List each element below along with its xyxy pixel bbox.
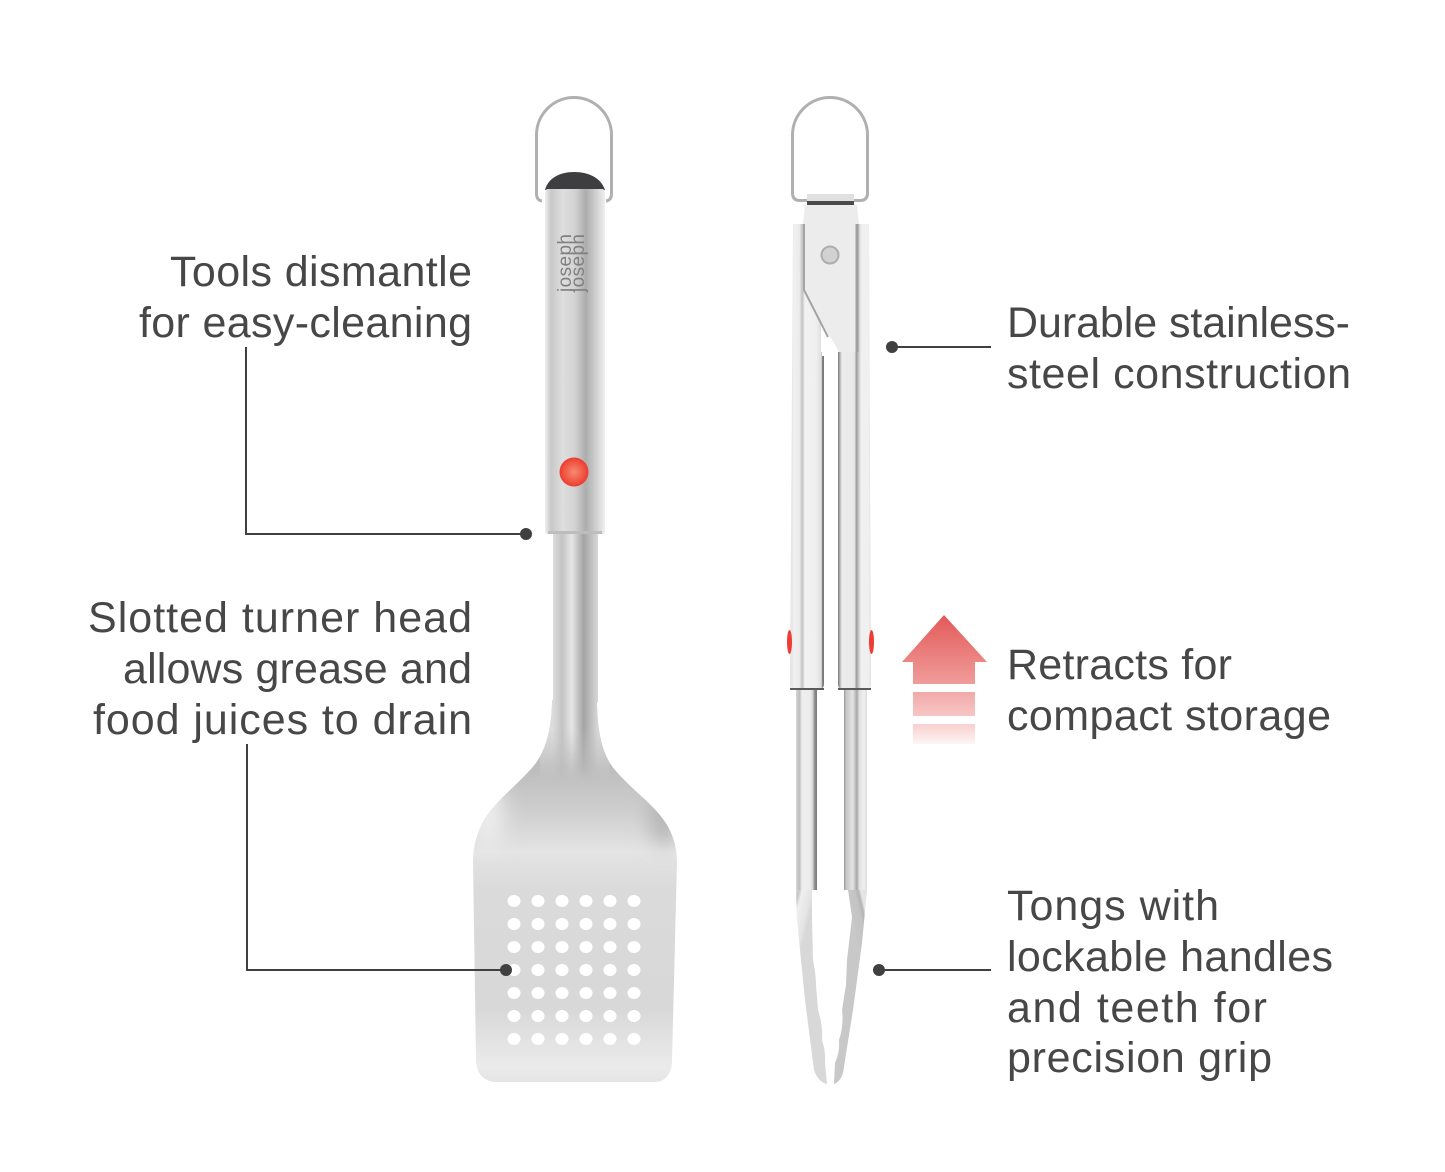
turner handle collar (548, 531, 602, 534)
tongs top plate (804, 222, 857, 352)
callout: durable steel (886, 299, 1351, 398)
tongs left arm (790, 224, 824, 689)
tongs lower left rod (796, 689, 817, 890)
tongs right arm (830, 224, 871, 689)
tongs engraved lines (790, 224, 871, 689)
turner hanging ring (536, 98, 612, 201)
callout: retracts: Retracts for (1007, 641, 1232, 689)
infographic canvas (90, 96, 1348, 1084)
callout: tools dismantle (139, 248, 532, 540)
turner shaft (553, 530, 598, 702)
tongs right jaw with teeth (834, 890, 867, 1084)
heading text: Tools dismantle (170, 248, 472, 296)
body text: precision grip (1007, 1034, 1272, 1082)
leader line (873, 964, 991, 976)
callout: tongs (873, 882, 1333, 1082)
turner handle (545, 189, 605, 534)
turner slot holes (508, 895, 640, 1045)
body text: lockable handles (1007, 933, 1333, 981)
body text: food juices to drain (93, 696, 472, 744)
tongs rivet (822, 246, 838, 264)
heading text: for easy-cleaning (139, 299, 472, 347)
body text (1007, 299, 1351, 398)
body text: allows grease and (123, 645, 472, 693)
icon: retract arrow (902, 615, 987, 744)
body text: and teeth for (1007, 984, 1267, 1032)
tongs hinge tab (803, 194, 859, 224)
turner brand mark: joseph (555, 234, 576, 293)
body text (1007, 882, 1333, 1082)
body text (88, 594, 472, 744)
heading text (139, 248, 472, 347)
callout: retracts (1007, 641, 1331, 740)
turner end cap (545, 172, 605, 190)
leader line (246, 347, 532, 540)
tongs red right stud (869, 630, 874, 654)
callout: retracts: compact storage (1007, 692, 1331, 740)
leader line (886, 341, 991, 353)
turner red button (560, 458, 588, 486)
tongs red left stud (787, 630, 792, 654)
tongs lower right rod (844, 689, 867, 890)
illustration: slotted turner (465, 98, 685, 1087)
turner brand mark: joseph (568, 234, 589, 293)
body text: Slotted turner head (88, 594, 472, 642)
turner slotted head (465, 695, 685, 1087)
tongs white slot arrow (822, 336, 838, 688)
tongs hanging ring (792, 98, 868, 200)
illustration: tongs (787, 98, 874, 1084)
body text: steel construction (1007, 350, 1351, 398)
callout: slotted turner head (88, 594, 512, 976)
leader line (247, 744, 512, 976)
tongs left jaw with teeth (796, 890, 827, 1084)
body text: Tongs with (1007, 882, 1219, 930)
body text: Durable stainless- (1007, 299, 1350, 347)
turner brand mark (555, 234, 589, 293)
